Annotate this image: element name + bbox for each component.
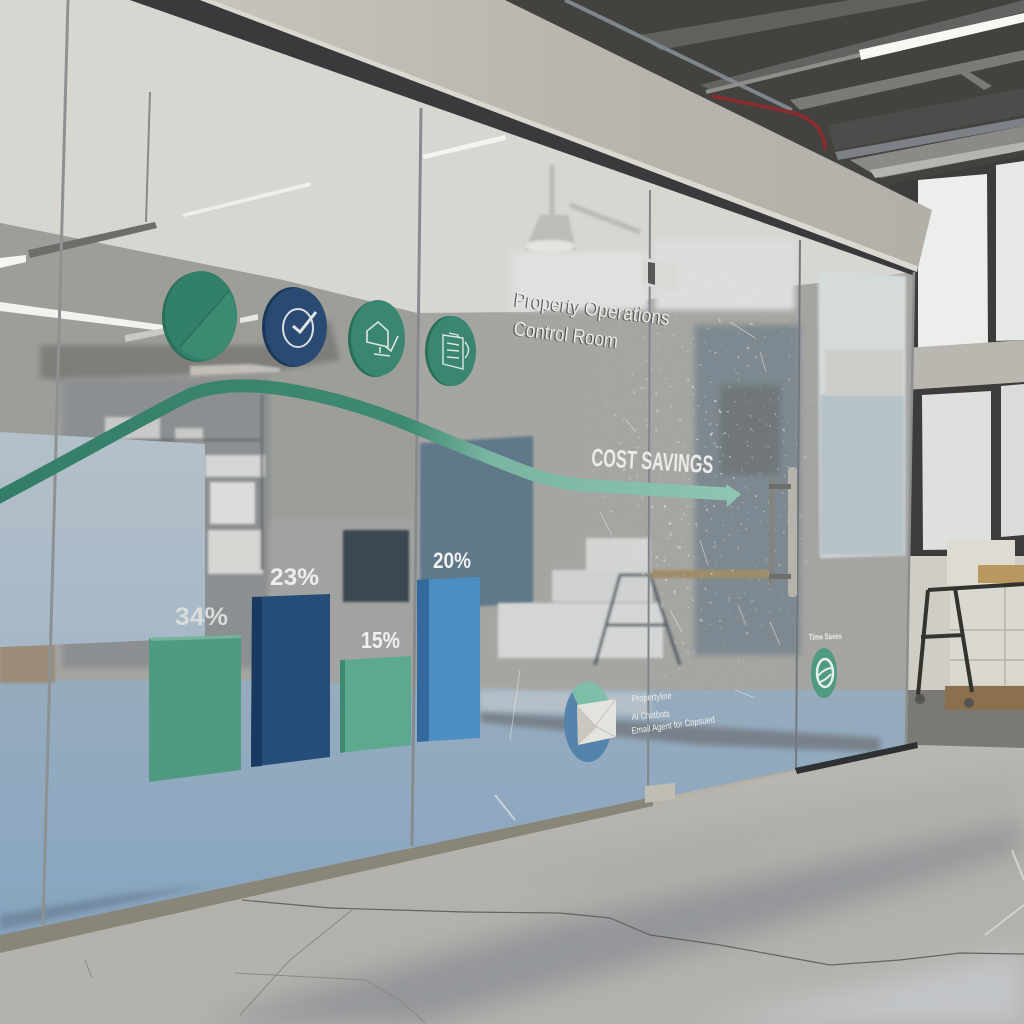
trend curve with arrow xyxy=(0,386,741,507)
icon: split disc xyxy=(162,271,237,362)
icon: check badge xyxy=(262,287,327,367)
label: cost savings: COST SAVINGS xyxy=(591,444,714,479)
background: windows on the far wall xyxy=(880,156,1024,565)
heading: property operations control room: Property Operations xyxy=(513,289,671,330)
bar: 20% xyxy=(417,548,480,742)
reflected boxes xyxy=(498,538,770,665)
bar: 34%: 34% xyxy=(175,603,228,631)
icon: envelope disc xyxy=(564,682,616,762)
reflected lights xyxy=(0,92,506,376)
reflected shelves xyxy=(105,395,265,574)
icon: house on stand with check xyxy=(348,300,405,377)
bar: 15%: 15% xyxy=(361,627,400,653)
email agent badge xyxy=(564,682,716,762)
reflected ceiling xyxy=(0,0,915,313)
reflected brick wall xyxy=(417,305,800,690)
time saved badge xyxy=(809,631,842,698)
floor cracks xyxy=(242,900,1024,965)
reflected equipment xyxy=(343,530,409,602)
bar: 23% xyxy=(251,564,330,767)
icon row xyxy=(162,271,476,386)
background: warehouse ceiling xyxy=(0,0,1024,240)
background: storage area with boxes and cart xyxy=(905,540,1024,760)
reflected dark teal panel xyxy=(420,436,533,610)
heading: property operations control room: Control Room xyxy=(512,318,619,353)
cart xyxy=(918,584,1024,695)
reflected dark room behind door xyxy=(695,325,800,655)
reflected pendant lamp xyxy=(525,165,640,252)
text: email agent caption: Propertyline xyxy=(631,691,672,705)
reflected window panes xyxy=(512,252,648,310)
text: time saved label: Time Saves xyxy=(809,631,842,642)
red pipe xyxy=(712,96,825,150)
bar: 15% xyxy=(340,627,411,753)
steel pipe xyxy=(565,0,792,110)
bar: 20%: 20% xyxy=(433,548,471,573)
bar: 34% xyxy=(149,603,241,782)
concrete floor xyxy=(0,745,1024,1024)
text: email agent caption xyxy=(631,691,716,737)
heading: property operations control room xyxy=(512,289,671,353)
glass scratches xyxy=(495,322,780,820)
conduit xyxy=(706,55,860,92)
bar: 23%: 23% xyxy=(270,564,319,591)
icon: recycle disc xyxy=(811,648,837,698)
icon: battery document xyxy=(425,316,476,386)
bar chart xyxy=(149,548,480,782)
dust layer xyxy=(592,286,813,698)
door hardware: hinge, top patch, handle xyxy=(642,257,797,803)
reflected left panel xyxy=(0,432,205,647)
reflected blue floor xyxy=(0,680,905,937)
concrete fascia above glass xyxy=(200,0,932,272)
ceiling light strip xyxy=(859,13,1024,60)
text: email agent caption: AI Chatbots xyxy=(631,709,670,723)
text: email agent caption: Email Agent for Copsued xyxy=(631,714,716,737)
